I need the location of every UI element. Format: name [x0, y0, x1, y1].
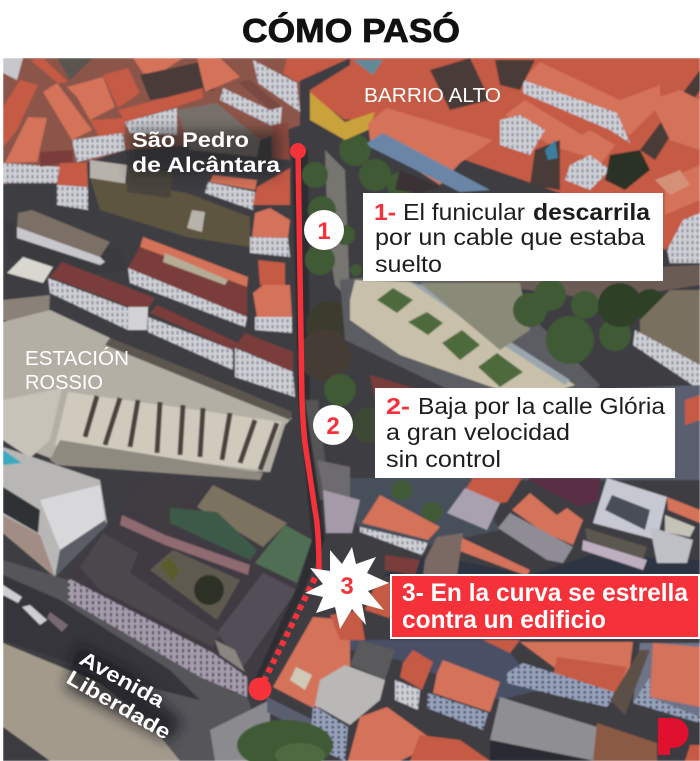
marker 2 — [313, 405, 353, 445]
label: Barrio Alto: BARRIO ALTO — [364, 85, 501, 107]
callout 2: sin control — [386, 446, 501, 472]
label shadow: Avenida Liberdade — [65, 645, 182, 742]
callout 1: descarrila — [533, 199, 650, 225]
marker 1 — [304, 210, 344, 250]
central long buildings — [3, 168, 295, 397]
Rossio station roofs — [3, 310, 292, 480]
callout 1 — [363, 193, 663, 281]
label: São Pedro de Alcântara: São Pedro — [132, 129, 249, 152]
lower-middle buildings — [317, 460, 700, 620]
street and square, bottom-left — [3, 560, 270, 761]
label: Estación Rossio — [25, 347, 129, 394]
marker 3: impact star: 3 — [340, 573, 354, 600]
trees at the bottom — [237, 720, 333, 761]
callout 2 — [375, 388, 675, 478]
palace block — [68, 477, 312, 697]
label shadow: São Pedro — [130, 130, 280, 175]
callout 3: 3- En la curva se estrella — [402, 579, 689, 607]
title: CÓMO PASÓ — [242, 12, 460, 49]
route line, dotted — [262, 578, 315, 685]
callout 1: suelto — [375, 251, 442, 277]
callout 2: Baja por la calle Glória — [418, 393, 665, 419]
route end point — [248, 678, 272, 700]
marker 2: 2 — [326, 413, 340, 440]
top-left city blocks — [3, 58, 350, 283]
label: São Pedro de Alcântara: de Alcântara — [132, 154, 280, 177]
callout 3: contra un edificio — [402, 606, 606, 634]
right-side buildings — [370, 290, 700, 480]
trees by the route — [299, 134, 413, 443]
logo — [658, 718, 688, 755]
label: Estación Rossio: ESTACIÓN — [25, 347, 129, 370]
label: Avenida Liberdade: Liberdade — [62, 666, 174, 744]
plaza garden — [340, 276, 664, 388]
buildings below the red callout — [350, 640, 700, 761]
buildings at the foot of the route — [267, 610, 490, 761]
cylinder corner building — [3, 447, 107, 577]
marker 1: 1 — [317, 218, 331, 245]
callout 1: por un cable que estaba — [375, 224, 645, 250]
label: Avenida Liberdade — [62, 647, 174, 744]
callout 2: a gran velocidad — [386, 419, 570, 445]
callout 1: 1- — [374, 199, 396, 225]
callout 3 — [390, 574, 700, 639]
label: Avenida Liberdade: Avenida — [76, 647, 168, 713]
route line, solid — [298, 151, 319, 572]
callout 2: 2- — [386, 393, 410, 419]
label: São Pedro de Alcântara — [132, 129, 280, 177]
road along the route — [250, 150, 350, 690]
callout 1: El funicular — [403, 199, 525, 225]
Barrio Alto roofs — [310, 58, 700, 300]
route start point — [290, 143, 306, 159]
label: Estación Rossio: ROSSIO — [25, 372, 103, 394]
marker 3: impact star — [305, 547, 389, 629]
